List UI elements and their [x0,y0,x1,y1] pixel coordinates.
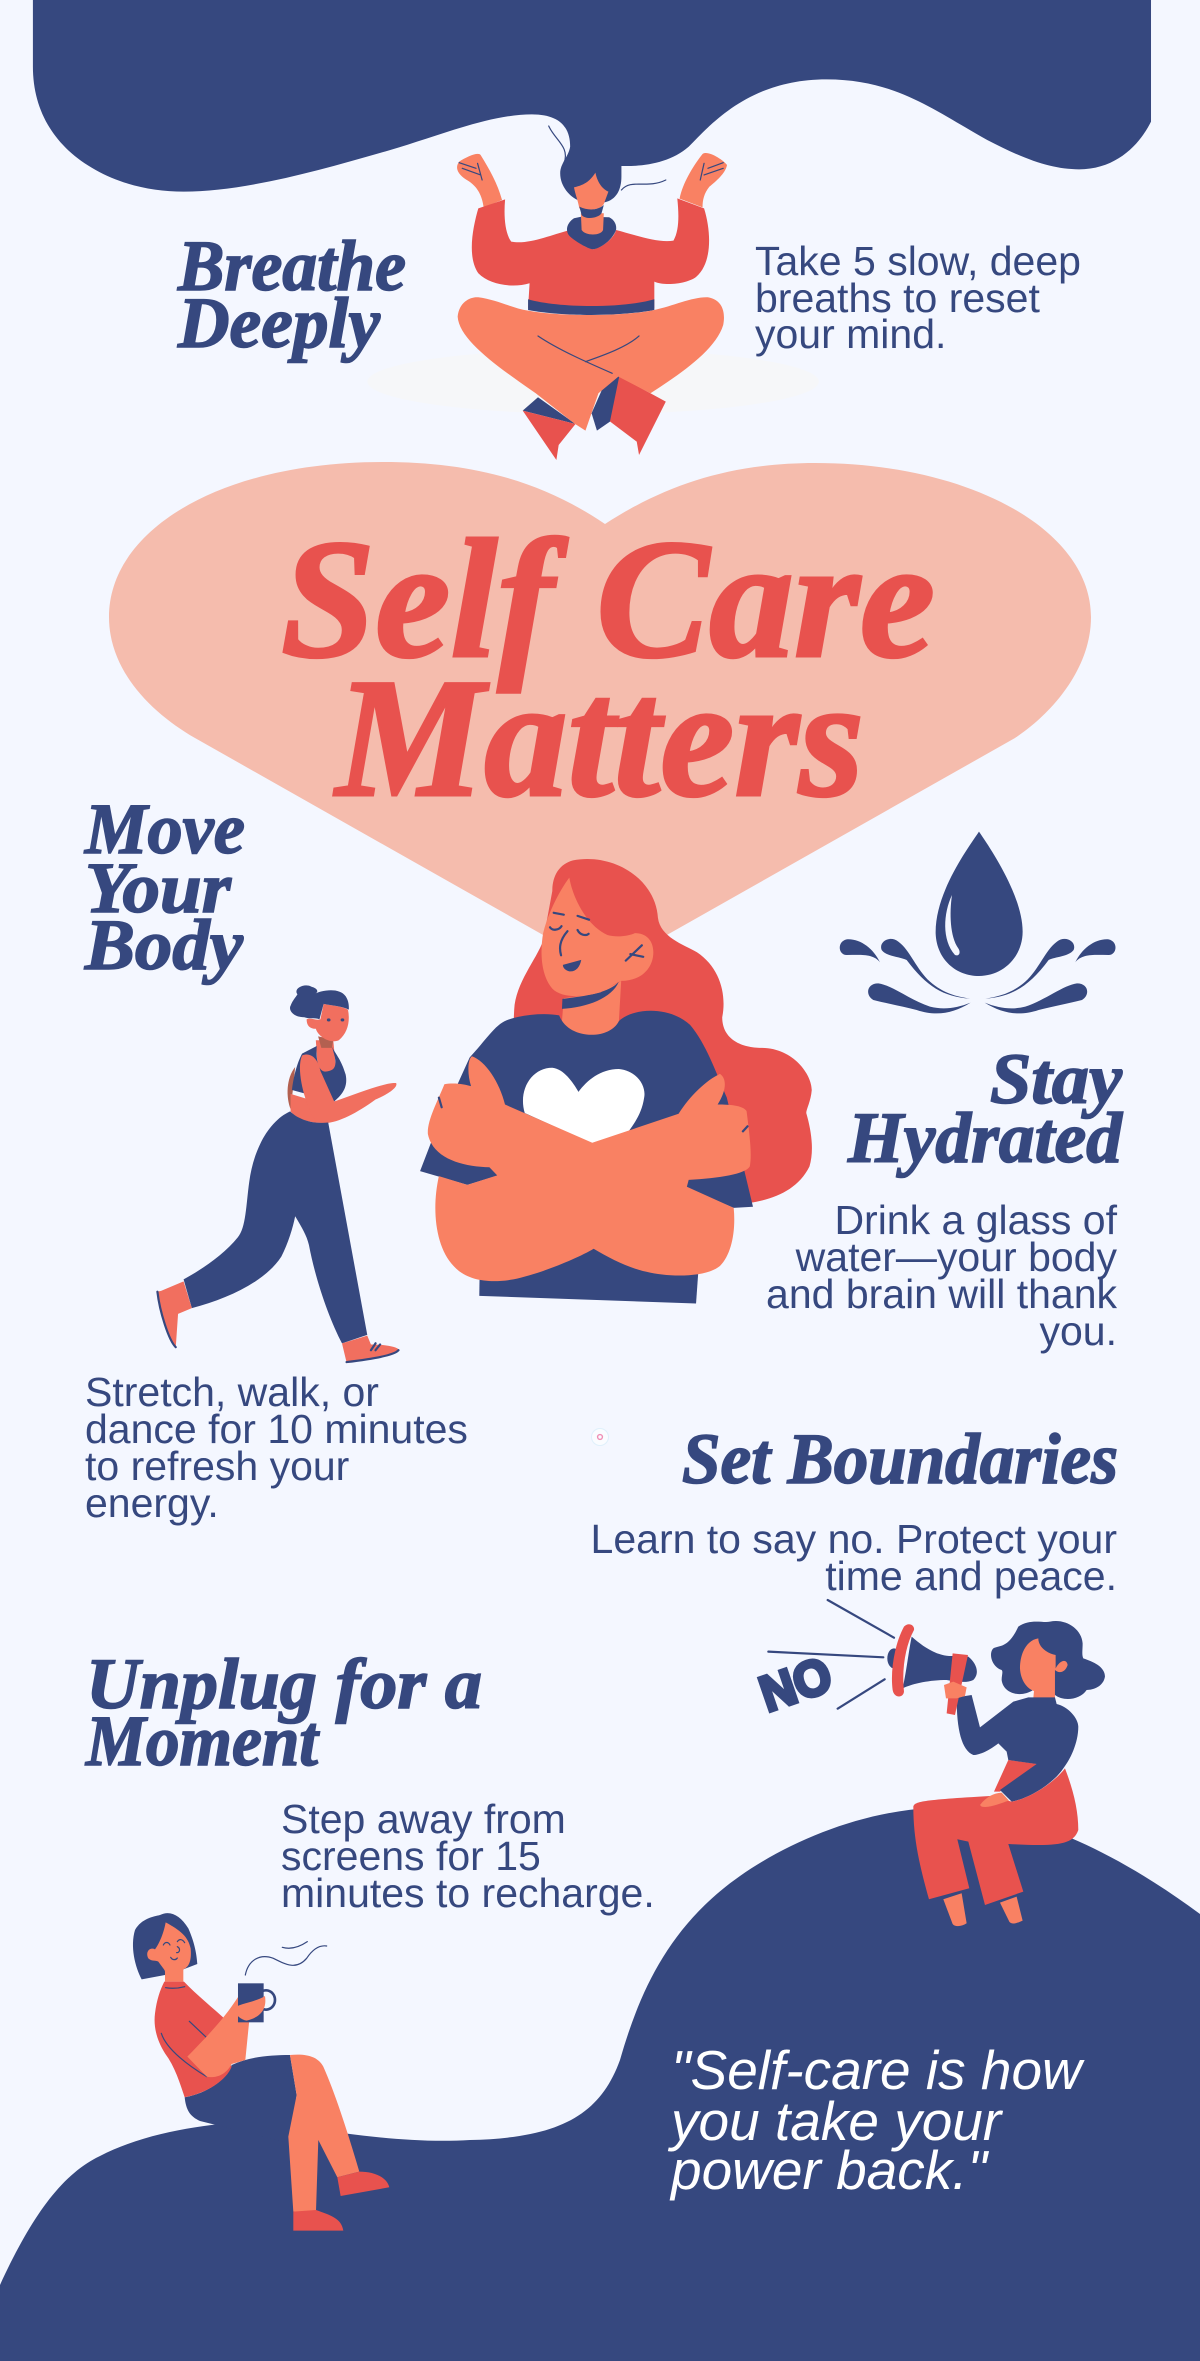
text: hydrate: you. [1040,1308,1117,1354]
text: hydrate: and brain will thank [766,1271,1117,1317]
heading: Unplug for a Moment: Moment [85,1701,320,1781]
text: breathe: breaths to reset [755,275,1040,321]
illustration: woman with megaphone saying no [753,1600,1105,1926]
text: move: dance for 10 minutes [85,1406,468,1452]
text: breathe: Take 5 slow, deep [755,238,1081,284]
text: hydrate: water—your body [795,1234,1117,1280]
illustration: meditating woman [367,126,819,460]
text: boundaries [591,1516,1117,1599]
heading: Breathe Deeply: Deeply [177,283,381,363]
text: move: energy. [85,1480,219,1526]
heading: Breathe Deeply: Breathe [177,226,406,306]
heading: Stay Hydrated: Hydrated [847,1098,1123,1178]
text: move: to refresh your [85,1443,349,1489]
heading: Move Your Body [84,789,245,985]
text: unplug: Step away from [281,1796,566,1842]
bottom wave [0,1808,1200,2361]
illustration: woman with coffee mug [133,1913,389,2231]
illustration: woman with megaphone saying no: NO [753,1646,839,1722]
heading: Stay Hydrated [847,1039,1123,1178]
heading: Stay Hydrated: Stay [990,1039,1123,1119]
quote [667,2039,1085,2201]
heart background [109,462,1091,970]
title: Self Care [281,505,935,693]
icon: water drop with splash [840,832,1116,1013]
title [281,505,935,832]
heading: Move Your Body: Body [84,905,244,985]
text: breathe: your mind. [755,311,946,357]
quote: power back." [669,2139,990,2201]
heading: Move Your Body: Your [85,848,232,928]
quote: "Self-care is how [671,2039,1085,2101]
text: hydrate [766,1197,1118,1354]
illustration: walking woman [157,985,398,1362]
text: move: Stretch, walk, or [85,1369,379,1415]
text: unplug: minutes to recharge. [281,1870,655,1916]
top wave with meditating woman's hair [33,0,1151,202]
heading: Move Your Body: Move [84,789,245,869]
heading: Breathe Deeply [177,226,406,363]
text: unplug: screens for 15 [281,1833,541,1879]
decorative marker dot [592,1428,608,1446]
quote: you take your [667,2090,1004,2152]
text: hydrate: Drink a glass of [834,1197,1118,1243]
heading: Unplug for a Moment: Unplug for a [86,1644,482,1724]
heading: Set Boundaries: Set Boundaries [682,1419,1118,1499]
text: breathe [755,238,1081,357]
title: Matters [333,644,864,832]
text: move [85,1369,468,1526]
text: boundaries: time and peace. [825,1553,1117,1599]
text: boundaries: Learn to say no. Protect your [591,1516,1117,1562]
heading: Unplug for a Moment [85,1644,482,1781]
illustration: woman hugging herself [420,859,812,1304]
text: unplug [281,1796,655,1916]
